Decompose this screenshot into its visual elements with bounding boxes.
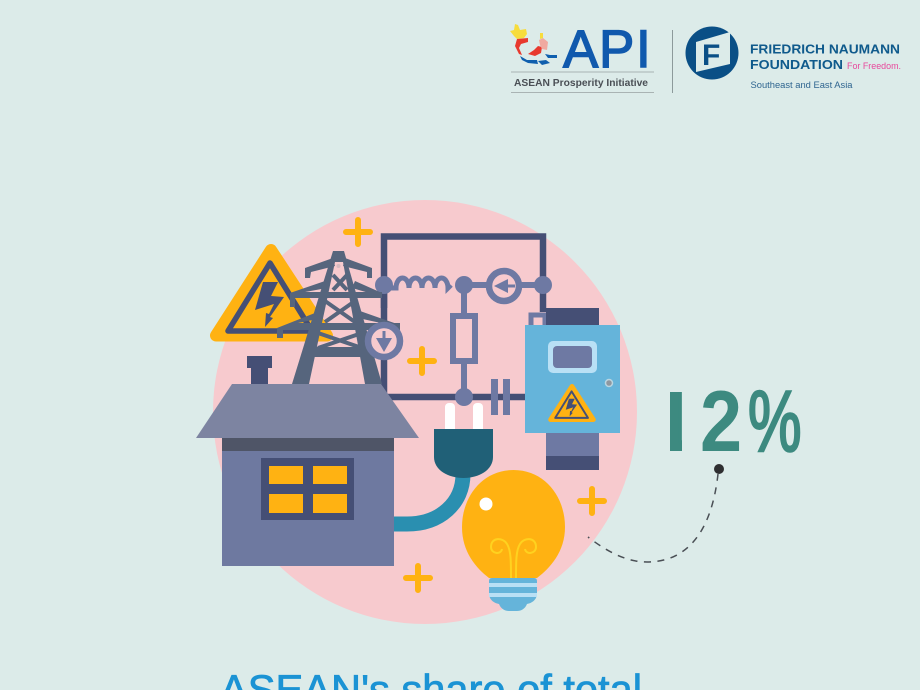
- big number: 12%: %: [748, 373, 802, 470]
- API wordmark: API: [563, 20, 651, 79]
- icon: foundation emblem: [686, 26, 738, 80]
- plus signs: [346, 220, 604, 590]
- logo: Friedrich Naumann Foundation: FOUNDATION: [750, 57, 843, 72]
- current source: [489, 271, 519, 301]
- icon: down arrow circle: [368, 325, 400, 357]
- icon: light bulb: [462, 470, 565, 611]
- pink background circle: [213, 200, 637, 624]
- API full name: ASEAN Prosperity Initiative: [514, 77, 648, 89]
- icon: ASEAN map: [510, 24, 557, 65]
- icon: transmission tower: [277, 251, 400, 384]
- region: Southeast and East Asia: [750, 80, 852, 90]
- circuit diagram: [375, 236, 552, 415]
- tagline: For Freedom.: [847, 61, 901, 72]
- icon: meter box: [525, 308, 620, 470]
- big number: 12%: 1: [647, 371, 697, 471]
- icon: house: [196, 356, 419, 566]
- icon: foundation emblem: F: [702, 39, 720, 72]
- inductor: [390, 278, 451, 288]
- icon: warning triangle: [216, 250, 327, 336]
- icon: small warning triangle: [551, 386, 593, 420]
- logo: ASEAN Prosperity Initiative: [510, 20, 654, 93]
- icon: plug and cable: [394, 403, 493, 524]
- resistor: [453, 316, 475, 361]
- logo: Friedrich Naumann Foundation: [686, 26, 901, 90]
- foundation name: FRIEDRICH NAUMANN: [750, 42, 900, 56]
- big number: 12%: [670, 390, 800, 453]
- callout: dashed connector: [588, 464, 724, 562]
- window: [261, 458, 354, 520]
- big number: 12%: 2: [700, 375, 742, 470]
- capacitor: [491, 379, 498, 415]
